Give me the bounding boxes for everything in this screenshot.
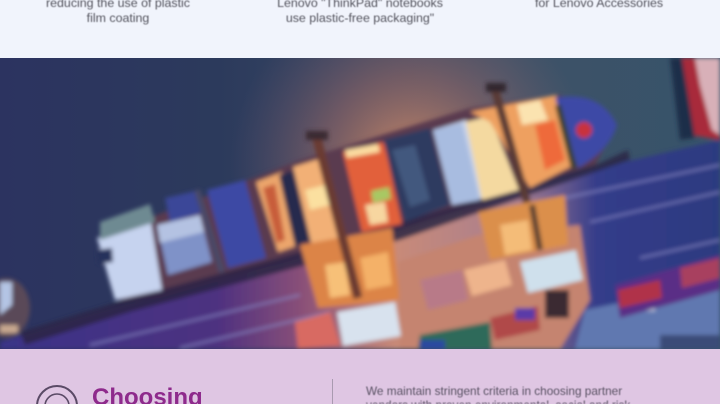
containers: blue-grey: [157, 215, 212, 275]
containers: orange: [256, 172, 296, 252]
left moored vessel: [0, 278, 30, 338]
hull shadow: [20, 150, 630, 345]
containers: bright orange: [293, 158, 345, 247]
photo: container ship at port: [0, 58, 720, 349]
quay road lines: [90, 165, 720, 348]
white terminal box left: [337, 302, 401, 346]
trucks and containers bottom right: [615, 255, 720, 318]
icon: sourcing circle: [36, 385, 78, 404]
bow red mark: [576, 122, 592, 138]
text: vendor criteria: We maintain stringent criteria in choosing partner: [366, 384, 622, 398]
containers: dark: [279, 170, 312, 246]
lower cargo right: [478, 195, 568, 260]
text: plastic film coating: film coating: [87, 10, 149, 24]
containers: front orange: [470, 95, 574, 188]
lower cargo left: [300, 228, 400, 308]
text: plastic film coating: [46, 0, 190, 26]
glow: [0, 58, 720, 349]
containers: red: [343, 142, 402, 232]
text: plastic-free packaging: use plastic-free packaging": [286, 10, 434, 24]
ship hull: [97, 95, 617, 300]
container stacks: [418, 322, 492, 349]
quay ground: [398, 225, 590, 349]
containers: dark blue: [383, 128, 450, 222]
crane 1: [306, 131, 358, 298]
top panel: [0, 0, 720, 58]
sea: [0, 58, 720, 349]
containers: blue: [207, 180, 266, 268]
text: vendor criteria: [366, 384, 630, 404]
bottom panel: [0, 349, 720, 404]
quay warehouses: [420, 270, 468, 310]
text: plastic-free packaging: [277, 0, 444, 26]
crane 2: [486, 83, 540, 248]
ship stern block: [97, 216, 162, 300]
ship bow: [555, 97, 617, 168]
containers: pale blue: [433, 120, 516, 205]
bottom right yard: [575, 282, 720, 349]
divider: [332, 379, 333, 404]
white terminal box right: [520, 250, 583, 293]
quay: [0, 140, 720, 349]
neighbouring ship top right: [680, 58, 720, 140]
